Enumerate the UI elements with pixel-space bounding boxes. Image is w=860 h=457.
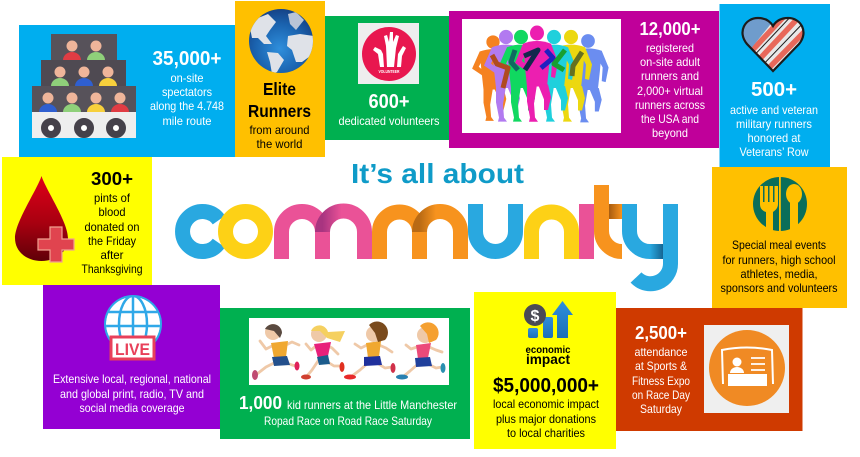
kid runners text bbox=[239, 393, 457, 428]
adult runners text bbox=[635, 19, 705, 140]
expo attendance text: on Race Day bbox=[632, 388, 690, 402]
blood donation text: Thanksgiving bbox=[82, 262, 142, 276]
elite runners text: from around bbox=[250, 123, 310, 137]
expo attendance text bbox=[632, 322, 690, 416]
icon: economic impact chart: economic bbox=[526, 344, 571, 356]
kid runners text: Ropad Race on Road Race Saturday bbox=[264, 414, 432, 428]
panel: spectators bbox=[19, 25, 235, 157]
panel: kid runners bbox=[220, 308, 470, 439]
elite runners text: Elite bbox=[263, 79, 296, 99]
meal events text: sponsors and volunteers bbox=[720, 281, 838, 295]
media coverage text: and global print, radio, TV and bbox=[60, 387, 204, 401]
panel: volunteers bbox=[325, 16, 449, 140]
elite runners text bbox=[248, 79, 311, 151]
spectators text bbox=[150, 48, 224, 128]
adult runners text: runners across bbox=[635, 98, 705, 112]
blood donation text: after bbox=[100, 248, 124, 262]
elite runners text: the world bbox=[256, 137, 302, 151]
image: four running children bbox=[249, 318, 449, 385]
panel: economic impact bbox=[474, 292, 616, 449]
adult runners text: 2,000+ virtual bbox=[637, 84, 703, 98]
military runners text: honored at bbox=[748, 131, 801, 145]
panel: military runners bbox=[720, 4, 830, 167]
adult runners text: runners and bbox=[641, 69, 699, 83]
expo attendance text: Fitness Expo bbox=[632, 374, 690, 388]
expo attendance text: at Sports & bbox=[635, 359, 687, 373]
icon: blood drop with cross bbox=[15, 176, 74, 262]
panel: meal events bbox=[712, 167, 847, 308]
blood donation text: 300+ bbox=[91, 168, 133, 189]
icon: expo booth bbox=[704, 325, 789, 413]
meal events text bbox=[720, 238, 838, 295]
economic impact text bbox=[493, 375, 600, 440]
meal events text: athletes, media, bbox=[740, 267, 818, 281]
icon: economic impact chart bbox=[524, 301, 573, 367]
spectators text: spectators bbox=[162, 85, 212, 99]
panel: adult runners bbox=[449, 11, 719, 148]
icon: volunteer hands: VOLUNTEER bbox=[378, 69, 400, 74]
media coverage text bbox=[53, 372, 211, 415]
blood donation text: pints of bbox=[94, 191, 131, 205]
spectators text: along the 4.748 bbox=[150, 99, 224, 113]
economic impact text: plus major donations bbox=[496, 412, 596, 426]
volunteers text: 600+ bbox=[368, 91, 410, 113]
blood donation text: the Friday bbox=[88, 234, 136, 248]
economic impact text: $5,000,000+ bbox=[493, 375, 599, 397]
icon: live globe bbox=[104, 295, 162, 360]
expo attendance text: 2,500+ bbox=[635, 322, 687, 343]
military runners text: active and veteran bbox=[730, 103, 818, 117]
blood donation text bbox=[82, 168, 142, 276]
panel: expo attendance bbox=[616, 308, 802, 431]
spectators text: on-site bbox=[170, 71, 204, 85]
adult runners text: on-site adult bbox=[640, 55, 701, 69]
expo attendance text: Saturday bbox=[640, 402, 682, 416]
media coverage text: Extensive local, regional, national bbox=[53, 372, 211, 386]
military runners text: 500+ bbox=[751, 79, 797, 101]
military runners text: military runners bbox=[736, 117, 812, 131]
blood donation text: blood bbox=[98, 205, 126, 219]
spectators text: mile route bbox=[162, 114, 212, 128]
media coverage text: social media coverage bbox=[80, 401, 185, 415]
spectators text: 35,000+ bbox=[152, 48, 222, 70]
icon: flag heart bbox=[741, 16, 805, 72]
icon: live globe: LIVE bbox=[115, 340, 150, 359]
adult runners text: 12,000+ bbox=[640, 19, 700, 39]
volunteers text: dedicated volunteers bbox=[338, 114, 440, 128]
adult runners text: registered bbox=[646, 41, 694, 55]
blood donation text: donated on bbox=[84, 220, 140, 234]
military runners text: Veterans’ Row bbox=[740, 145, 809, 159]
panel: blood donation bbox=[2, 157, 152, 285]
image: colourful runner silhouettes bbox=[462, 19, 621, 133]
adult runners text: beyond bbox=[652, 126, 688, 140]
adult runners text: the USA and bbox=[641, 112, 699, 126]
expo attendance text: attendance bbox=[634, 345, 688, 359]
economic impact text: to local charities bbox=[507, 426, 585, 440]
meal events text: Special meal events bbox=[732, 238, 826, 252]
wordmark: community bbox=[183, 185, 671, 284]
elite runners text: Runners bbox=[248, 101, 311, 121]
panel: elite runners bbox=[235, 1, 325, 157]
icon: economic impact chart: impact bbox=[526, 351, 570, 367]
heading: It's all about: It’s all about bbox=[351, 158, 524, 189]
icon: economic impact chart: $ bbox=[531, 308, 540, 325]
kid runners text: 1,000 bbox=[239, 393, 282, 413]
economic impact text: local economic impact bbox=[493, 397, 600, 411]
icon: grandstand with spectators bbox=[32, 34, 136, 138]
volunteers text bbox=[338, 91, 440, 128]
meal events text: for runners, high school bbox=[722, 253, 836, 267]
military runners text bbox=[730, 79, 818, 159]
panel: media coverage bbox=[43, 285, 220, 429]
kid runners text: kid runners at the Little Manchester bbox=[287, 398, 457, 412]
icon: globe bbox=[249, 9, 314, 74]
icon: fork and spoon bbox=[753, 176, 807, 232]
